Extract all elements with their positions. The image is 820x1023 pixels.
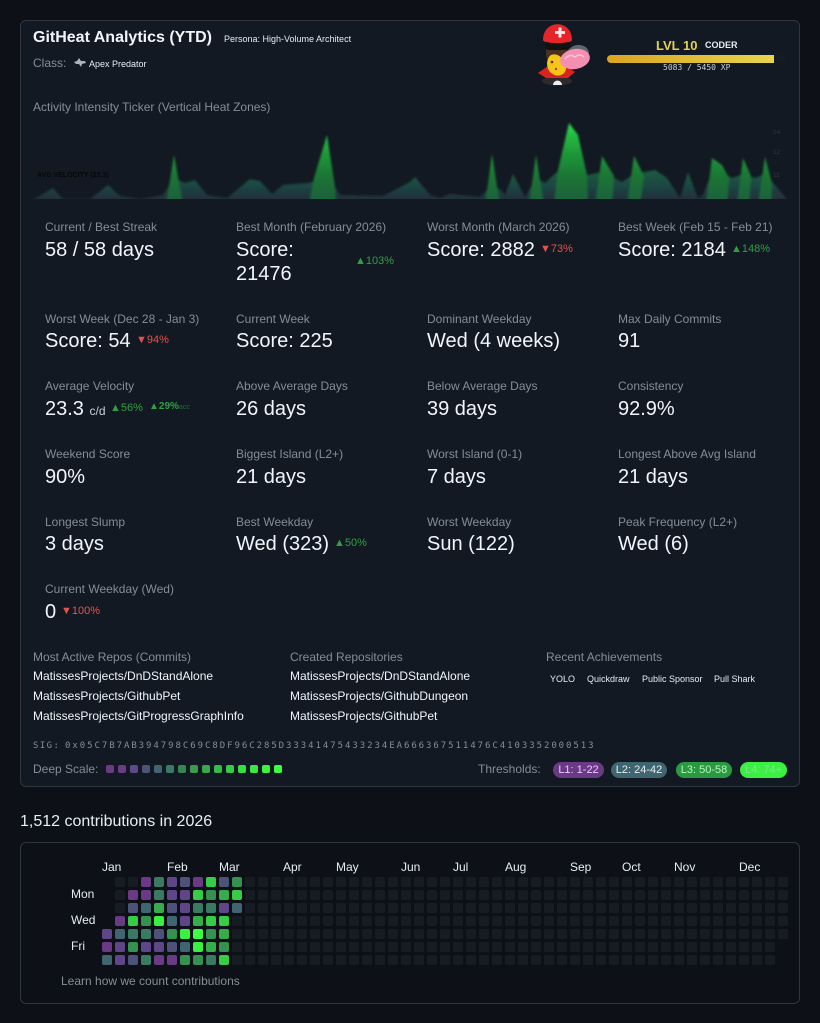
stat: worst island: Worst Island (0-1)	[427, 447, 522, 461]
month labels: Feb	[167, 860, 188, 874]
stat: best month	[236, 220, 394, 285]
y axis labels: 10	[773, 192, 781, 199]
stat: below average days: Below Average Days	[427, 379, 538, 393]
stat: peak frequency: Peak Frequency (L2+)	[618, 515, 737, 529]
stat: weekend score: 90%	[45, 466, 85, 488]
stat: worst week	[45, 312, 199, 352]
month labels: Mar	[219, 860, 240, 874]
stat: below average days: 39 days	[427, 398, 497, 420]
month labels: Jun	[401, 860, 420, 874]
stat: weekend score: Weekend Score	[45, 447, 130, 461]
y axis labels: 12	[773, 149, 781, 156]
stat: longest above average island: Longest Above Avg Island	[618, 447, 756, 461]
stat: consistency	[618, 379, 684, 420]
stat: current week: Current Week	[236, 312, 310, 326]
stat: streak: 58 / 58 days	[45, 239, 154, 261]
stat: consistency: Consistency	[618, 379, 683, 393]
stat: current weekday: ▼100%	[61, 605, 100, 617]
stat: best week: Best Week (Feb 15 - Feb 21)	[618, 220, 773, 234]
stat: average velocity	[45, 379, 190, 420]
stat: current weekday: Current Weekday (Wed)	[45, 582, 174, 596]
stat: best week	[618, 220, 773, 261]
stat: biggest island: Biggest Island (L2+)	[236, 447, 343, 461]
y axis labels	[773, 129, 781, 199]
stat: best weekday: Wed (323)	[236, 533, 329, 555]
stat: best month: Score:	[236, 239, 294, 261]
stat: weekend score	[45, 447, 130, 488]
list: most active repos: MatissesProjects/DnDStandAlone	[33, 669, 213, 683]
weekday labels: Mon	[71, 887, 94, 901]
stat: worst island: 7 days	[427, 466, 486, 488]
list: recent achievements	[546, 650, 755, 684]
stat: current weekday: 0	[45, 601, 56, 623]
stat: biggest island: 21 days	[236, 466, 306, 488]
stat: dominant weekday	[427, 312, 560, 352]
stat: longest slump	[45, 515, 125, 555]
y axis labels: 14	[773, 129, 781, 136]
legend: thresholds: L4: 74+	[745, 764, 782, 776]
stat: streak: Current / Best Streak	[45, 220, 157, 234]
chart heading: Activity Intensity Ticker (Vertical Heat Zones)	[33, 100, 270, 114]
weekday labels: Fri	[71, 939, 85, 953]
stat: worst month: ▼73%	[540, 243, 573, 255]
list: created repositories: MatissesProjects/DnDStandAlone	[290, 669, 470, 683]
stat: average velocity: ▲56%	[110, 402, 143, 414]
y axis labels: 11	[773, 172, 780, 179]
legend: deep scale	[33, 762, 282, 776]
month labels: Nov	[674, 860, 695, 874]
list: created repositories: MatissesProjects/GithubPet	[290, 709, 437, 723]
stat: best weekday: ▲50%	[334, 537, 367, 549]
avg velocity annotation: AVG VELOCITY (23.3)	[37, 172, 109, 179]
stat: worst week: Score: 54	[45, 330, 131, 352]
stat: dominant weekday: Wed (4 weeks)	[427, 330, 560, 352]
list: recent achievements: Quickdraw	[587, 674, 630, 684]
stat: streak	[45, 220, 157, 261]
weekday labels	[71, 887, 95, 953]
area chart: activity ticker	[34, 122, 787, 199]
stat: biggest island	[236, 447, 343, 488]
legend: thresholds: L1: 1-22	[558, 764, 599, 776]
list: recent achievements: Public Sponsor	[642, 674, 703, 684]
stat: current week: Score: 225	[236, 330, 333, 352]
stat: worst weekday: Worst Weekday	[427, 515, 511, 529]
stat: worst island	[427, 447, 522, 488]
stat: best month: ▲103%	[355, 255, 394, 267]
contribution heatmap	[102, 877, 788, 965]
stat: best week: Score: 2184	[618, 239, 726, 261]
class label	[33, 56, 147, 70]
list: recent achievements: Recent Achievements	[546, 650, 662, 664]
list: most active repos: MatissesProjects/GithubPet	[33, 689, 180, 703]
stat: best month: 21476	[236, 263, 292, 285]
stat: max daily commits	[618, 312, 721, 352]
legend: thresholds	[478, 762, 787, 778]
stat: average velocity: ▲29%acc	[149, 401, 190, 412]
list: created repositories: MatissesProjects/GithubDungeon	[290, 689, 468, 703]
stat: longest slump: Longest Slump	[45, 515, 125, 529]
stat: above average days: Above Average Days	[236, 379, 348, 393]
stat: longest above average island: 21 days	[618, 466, 688, 488]
stat: dominant weekday: Dominant Weekday	[427, 312, 532, 326]
stat: worst month: Worst Month (March 2026)	[427, 220, 570, 234]
class label: Apex Predator	[89, 59, 147, 69]
legend: deep scale: Deep Scale:	[33, 762, 98, 776]
stat: above average days	[236, 379, 348, 420]
stat: max daily commits: 91	[618, 330, 640, 352]
signature: 0x05C7B7AB394798C69C8DF96C285D33341475433234EA666367511476C4103352000513	[65, 741, 596, 751]
persona label: Persona: High-Volume Architect	[224, 34, 351, 44]
list: created repositories	[290, 650, 470, 723]
list: created repositories: Created Repositories	[290, 650, 403, 664]
icon: avatar with helmet and brain	[538, 24, 590, 86]
stat: worst month	[427, 220, 573, 261]
stat: worst weekday: Sun (122)	[427, 533, 515, 555]
stat: current week	[236, 312, 333, 352]
stat: best weekday	[236, 515, 367, 555]
heading: contributions: 1,512 contributions in 2026	[20, 813, 212, 830]
stat: current weekday	[45, 582, 174, 623]
footnote link: Learn how we count contributions	[61, 974, 240, 988]
stat: average velocity: 23.3 c/d	[45, 398, 106, 420]
month labels: Jul	[453, 860, 468, 874]
stat: longest above average island	[618, 447, 756, 488]
list: most active repos	[33, 650, 244, 723]
stat: consistency: 92.9%	[618, 398, 675, 420]
legend: thresholds: L2: 24-42	[616, 764, 662, 776]
level label: LVL 10	[656, 38, 697, 53]
list: recent achievements: Pull Shark	[714, 674, 755, 684]
stat: worst week: Worst Week (Dec 28 - Jan 3)	[45, 312, 199, 326]
xp progress bar	[607, 55, 787, 63]
month labels: Oct	[622, 860, 641, 874]
stat: best weekday: Best Weekday	[236, 515, 313, 529]
list: recent achievements: YOLO	[550, 674, 575, 684]
panel: GitHeat analytics card	[20, 20, 800, 787]
month labels: Aug	[505, 860, 526, 874]
list: most active repos: Most Active Repos (Commits)	[33, 650, 191, 664]
signature: SIG:	[33, 741, 60, 751]
month labels	[102, 860, 760, 874]
stat: worst month: Score: 2882	[427, 239, 535, 261]
stat: worst week: ▼94%	[136, 334, 169, 346]
coder label: CODER	[705, 40, 738, 50]
stat: below average days	[427, 379, 538, 420]
panel: contribution calendar	[20, 842, 800, 1004]
xp value: 5083 / 5450 XP	[663, 63, 730, 72]
month labels: Jan	[102, 860, 121, 874]
month labels: Sep	[570, 860, 591, 874]
legend: thresholds: L3: 50-58	[681, 764, 727, 776]
stat: max daily commits: Max Daily Commits	[618, 312, 721, 326]
stat: longest slump: 3 days	[45, 533, 104, 555]
month labels: Dec	[739, 860, 760, 874]
title: GitHeat Analytics (YTD)	[33, 29, 212, 46]
month labels: Apr	[283, 860, 302, 874]
stat: peak frequency: Wed (6)	[618, 533, 689, 555]
stat: peak frequency	[618, 515, 737, 555]
month labels: May	[336, 860, 359, 874]
stat: above average days: 26 days	[236, 398, 306, 420]
weekday labels: Wed	[71, 913, 95, 927]
legend: thresholds: Thresholds:	[478, 762, 541, 776]
list: most active repos: MatissesProjects/GitProgressGraphInfo	[33, 709, 244, 723]
class label: Class:	[33, 56, 66, 70]
stat: worst weekday	[427, 515, 515, 555]
stat: best week: ▲148%	[731, 243, 770, 255]
stat: average velocity: Average Velocity	[45, 379, 134, 393]
stat: best month: Best Month (February 2026)	[236, 220, 386, 234]
